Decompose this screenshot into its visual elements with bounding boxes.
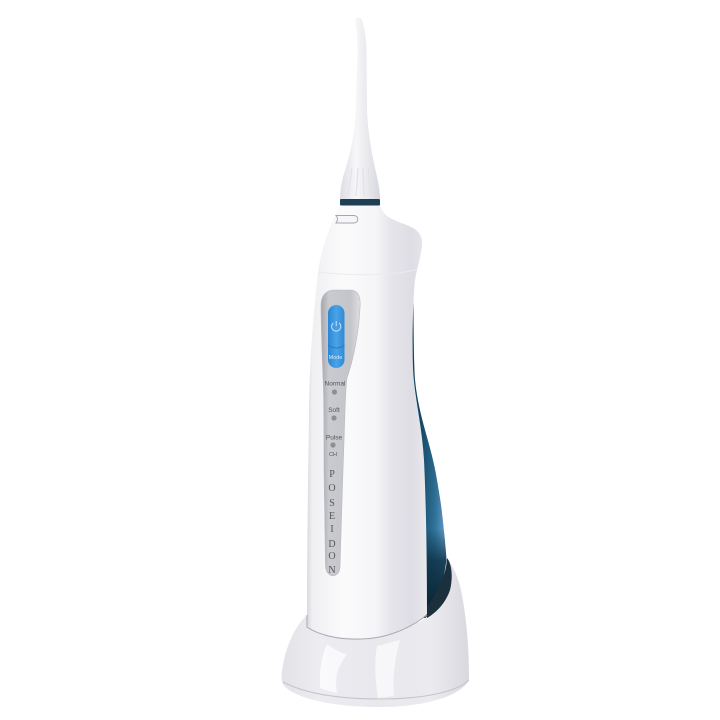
top button	[336, 216, 358, 223]
brand name: I	[330, 524, 334, 535]
handle body	[307, 206, 427, 638]
collar ring	[340, 199, 380, 206]
brand name: O	[328, 483, 336, 494]
normal indicator	[325, 380, 346, 395]
base recess shadow	[427, 558, 452, 618]
power and mode button	[328, 305, 344, 368]
normal indicator: Normal	[325, 380, 346, 388]
control panel	[321, 290, 360, 576]
brand name: P	[329, 469, 335, 480]
pulse indicator: CH	[329, 452, 337, 458]
water tank	[410, 300, 446, 618]
charging base	[282, 558, 469, 707]
nozzle ribs	[348, 168, 371, 196]
pulse indicator: Pulse	[326, 434, 343, 442]
base seam	[283, 680, 469, 699]
brand name: N	[328, 565, 336, 576]
brand name: O	[328, 551, 336, 562]
brand name: E	[329, 511, 335, 522]
base highlights	[320, 644, 347, 693]
mode label: Mode	[329, 355, 342, 361]
power icon	[332, 321, 341, 331]
base front rim	[307, 615, 427, 639]
soft indicator	[328, 407, 340, 421]
soft indicator: Soft	[328, 407, 340, 414]
cap seam	[318, 270, 415, 275]
nozzle	[340, 18, 380, 199]
brand name: D	[328, 539, 336, 550]
brand name	[328, 469, 336, 576]
pulse indicator	[326, 434, 343, 458]
brand name: S	[329, 498, 335, 509]
